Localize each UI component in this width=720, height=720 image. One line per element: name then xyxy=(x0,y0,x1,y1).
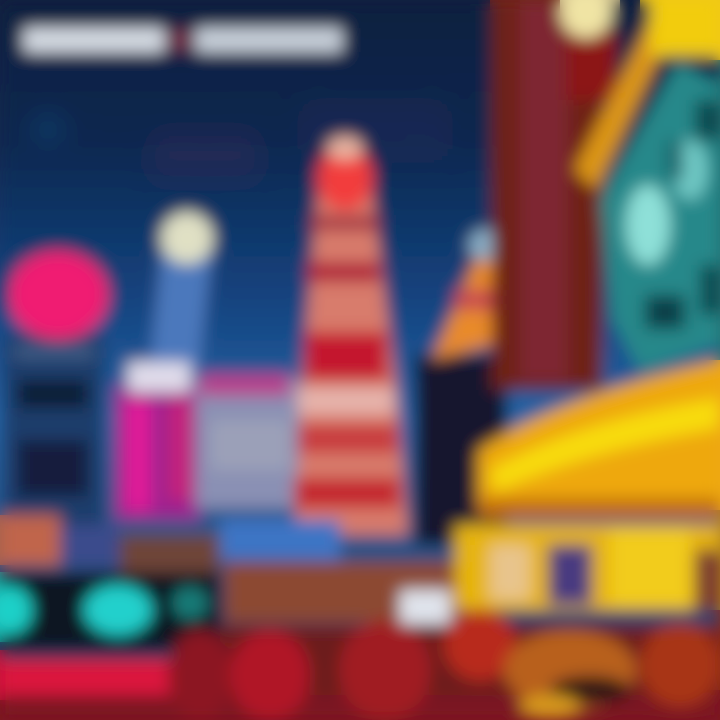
central hotel block xyxy=(115,362,300,520)
red striped tower xyxy=(294,136,408,535)
teal street signs xyxy=(0,572,220,650)
marquee sign frame xyxy=(560,0,720,190)
red crowd foreground xyxy=(0,609,720,720)
teal diamond sign xyxy=(600,62,720,372)
dark tower with orange peak xyxy=(415,229,510,545)
faint sky lettering xyxy=(32,100,450,180)
slim blue tower xyxy=(150,212,213,370)
street level buildings xyxy=(0,515,455,624)
left tower with pink dome xyxy=(4,251,108,525)
blurred title bar xyxy=(24,28,342,52)
lower yellow facade xyxy=(455,525,720,610)
brown pillar xyxy=(492,0,616,390)
yellow marquee xyxy=(478,360,720,518)
